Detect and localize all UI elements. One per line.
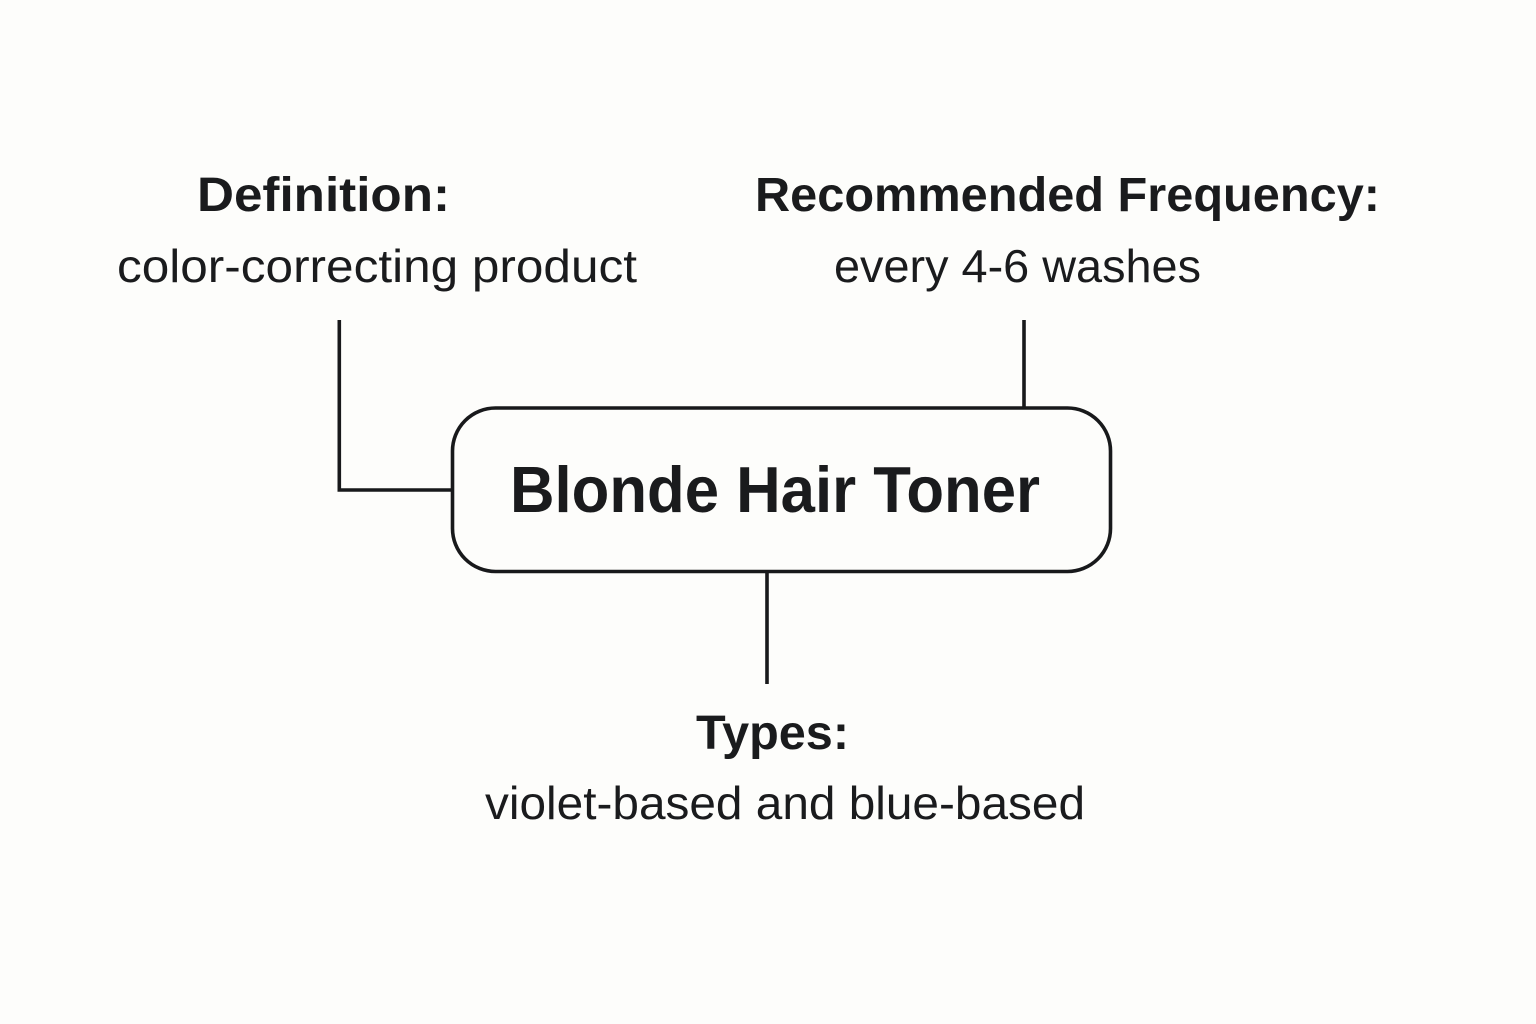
text block: recommended frequency: every 4-6 washes <box>834 240 1201 292</box>
text block: definition: Definition: <box>197 169 450 222</box>
connector: definition to central box <box>339 320 452 490</box>
central box: Blonde Hair Toner: Blonde Hair Toner <box>510 453 1040 526</box>
central box: Blonde Hair Toner <box>452 408 1110 572</box>
text block: types <box>485 707 1085 829</box>
connector: central box to types <box>765 572 769 684</box>
text block: definition <box>117 169 637 292</box>
connector: frequency to central box <box>1022 320 1026 407</box>
text block: definition: color-correcting product <box>117 240 637 292</box>
text block: recommended frequency: Recommended Frequency: <box>755 169 1380 222</box>
text block: recommended frequency <box>755 169 1380 292</box>
text block: types: Types: <box>696 707 849 760</box>
text block: types: violet-based and blue-based <box>485 777 1085 829</box>
